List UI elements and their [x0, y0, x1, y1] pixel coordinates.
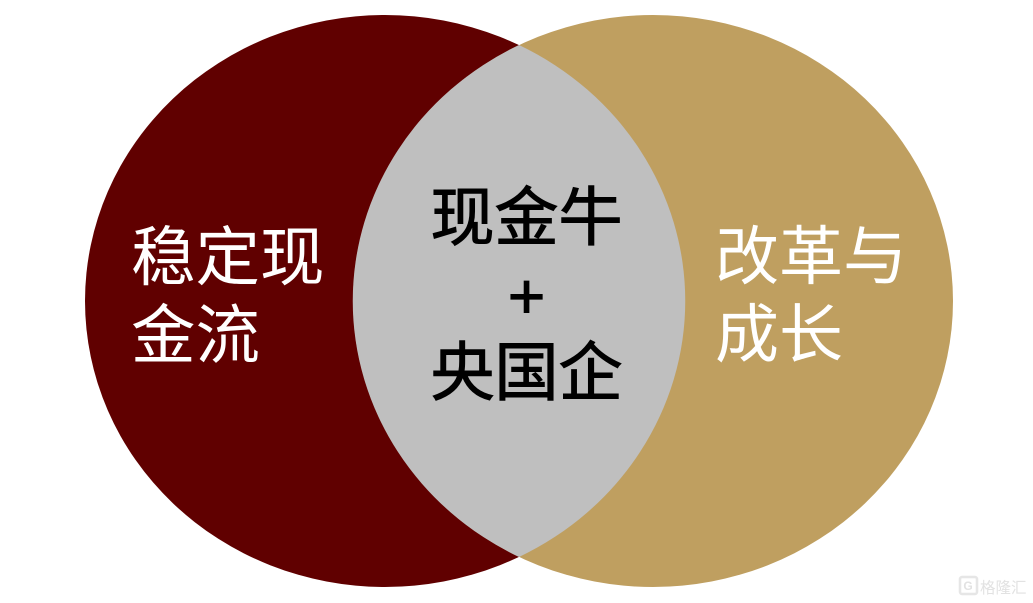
right circle: reform and growth: 改革与 [715, 221, 907, 293]
overlap: cash cow plus state-owned enterprises: + [508, 260, 545, 332]
right circle: reform and growth [353, 15, 953, 587]
left circle: stable cash flow: 金流 [131, 300, 260, 372]
left circle: stable cash flow [85, 15, 685, 587]
overlap: cash cow plus state-owned enterprises: 央国企 [430, 337, 622, 409]
left circle: stable cash flow: 稳定现 [131, 222, 325, 294]
overlap: cash cow plus state-owned enterprises [353, 45, 685, 557]
watermark: G [963, 579, 973, 593]
watermark [960, 577, 1027, 597]
overlap: cash cow plus state-owned enterprises: 现金牛 [430, 182, 622, 254]
right circle: reform and growth: 成长 [715, 299, 843, 371]
watermark: 格隆汇 [980, 579, 1027, 597]
